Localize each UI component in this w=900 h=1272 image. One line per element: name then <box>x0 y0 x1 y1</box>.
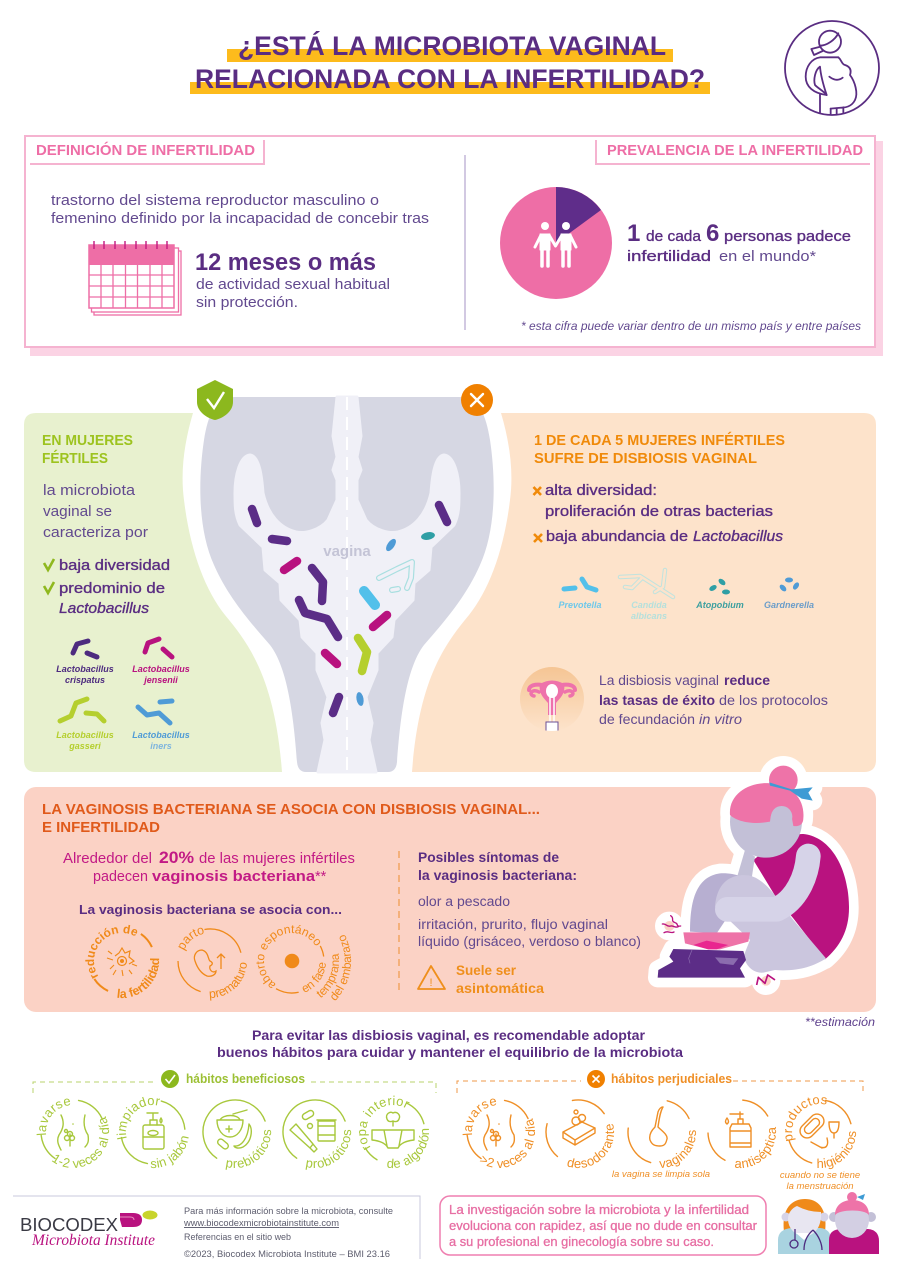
text: prevalence: 6 <box>706 220 719 247</box>
text: prevalence: 1 <box>627 220 640 247</box>
list: fertile features <box>44 557 170 617</box>
text: symptoms <box>418 850 641 949</box>
labels: species: crispatus <box>65 675 105 685</box>
caption: vagina cleans itself: la vagina se limpia sola <box>612 1169 710 1180</box>
text: IVF <box>599 672 828 727</box>
habit: hygiene products <box>785 1097 856 1170</box>
labels: species: Lactobacillus <box>56 730 114 740</box>
text: 12 months: 12 meses o más <box>195 249 376 276</box>
icon: orange x <box>461 384 493 416</box>
heading: fertile women <box>42 432 133 467</box>
callout: consult your gynecologist: evoluciona con rapidez, así que no dude en consultar <box>449 1219 757 1233</box>
section: beneficial habits <box>32 1070 436 1170</box>
illustration: woman sitting <box>658 766 849 985</box>
heading: beneficial habits <box>161 1070 305 1088</box>
labels: other bacteria: Atopobium <box>695 600 744 610</box>
labels: species: jensenii <box>143 675 178 685</box>
ovals in cross-section <box>355 531 436 707</box>
section: harmful habits <box>456 1070 864 1192</box>
text: 12 months: sin protección. <box>196 294 298 311</box>
icon: premature birth: parto <box>178 928 204 952</box>
habit: wash 1-2 times: lavarse <box>36 1098 70 1136</box>
logo: Biocodex Microbiota Institute <box>20 1210 158 1249</box>
icon: gardnerella <box>778 578 800 593</box>
icon: jensenii <box>145 639 172 657</box>
text: habits intro <box>217 1028 684 1060</box>
icon: miscarriage: aborto espontáneo <box>256 925 320 988</box>
text: more info: Referencias en el sitio web <box>184 1232 291 1243</box>
text: more info <box>183 1206 393 1260</box>
icon: miscarriage <box>256 925 352 1000</box>
text: microbiota description: la microbiota <box>43 482 136 499</box>
text: prevalence: infertilidad <box>627 248 711 265</box>
icon: reduced fertility: la fertilidad <box>117 958 160 998</box>
doctor <box>778 1199 831 1254</box>
icon: couple <box>535 222 576 266</box>
habit: cotton underwear: ropa interior <box>359 1096 410 1150</box>
habit: washing more than twice: >2 veces al día <box>480 1118 536 1168</box>
list: fertile features: predominio de <box>59 580 165 597</box>
text: 12 months <box>195 249 390 311</box>
heading: harmful habits: hábitos perjudiciales <box>611 1072 732 1086</box>
heading: prevalence: PREVALENCIA DE LA INFERTILIDAD <box>607 142 863 159</box>
icon: warning <box>418 966 445 989</box>
icon: miscarriage: del embarazo <box>331 935 352 1000</box>
text: more info: ©2023, Biocodex Microbiota Institute – BMI 23.16 <box>184 1249 390 1260</box>
callout: consult your gynecologist: La investigación sobre la microbiota y la infertilidad <box>449 1203 749 1217</box>
text: prevalence: en el mundo* <box>719 248 816 265</box>
bacteria in cross-section <box>252 505 447 713</box>
icon: green shield check <box>197 380 233 420</box>
icon: calendar <box>89 241 181 315</box>
text: 20 percent: 20% <box>159 848 194 867</box>
icon: uterus and IVF <box>520 667 584 733</box>
text: more info: www.biocodexmicrobiotainstitute.com <box>183 1218 339 1229</box>
text: microbiota description: caracteriza por <box>43 524 148 541</box>
habit: wash 1-2 times <box>36 1098 110 1168</box>
labels: other bacteria: Gardnerella <box>764 600 814 610</box>
habit: soap-free cleanser: sin jabón <box>150 1136 189 1168</box>
icon: premature birth: prematuro <box>210 962 247 1001</box>
chart: pie 1 in 6 <box>500 187 612 299</box>
habit: antiseptic: antiséptica <box>735 1126 776 1168</box>
icon: miscarriage: temprana <box>316 953 339 998</box>
text: 20 percent: Alrededor del <box>63 851 152 867</box>
labels: species: Lactobacillus <box>132 730 190 740</box>
caption: outside menstruation: la menstruación <box>786 1181 854 1192</box>
heading: beneficial habits: hábitos beneficiosos <box>186 1072 305 1086</box>
icon: crispatus <box>73 641 97 657</box>
habit: prebiotics <box>202 1099 272 1170</box>
habit: antiseptic <box>707 1099 776 1168</box>
text: symptoms: la vaginosis bacteriana: <box>418 868 577 883</box>
diagram: vagina cross-section <box>200 397 494 772</box>
list: dysbiosis features: alta diversidad: <box>545 482 657 499</box>
text: definition <box>51 192 429 227</box>
habit: washing more than twice <box>462 1098 536 1168</box>
text: microbiota description: vaginal se <box>43 503 112 520</box>
text: more info: Para más información sobre la microbiota, consulte <box>184 1206 393 1217</box>
labels: species: gasseri <box>68 741 101 751</box>
list: fertile features: baja diversidad <box>59 557 170 574</box>
text: 20 percent <box>63 848 355 885</box>
text: 12 months: de actividad sexual habitual <box>196 276 390 293</box>
patient <box>829 1192 879 1254</box>
title: RELACIONADA CON LA INFERTILIDAD? <box>195 64 705 94</box>
habit: probiotics: probióticos <box>306 1130 352 1170</box>
habit: hygiene products: productos <box>785 1097 827 1142</box>
text: habits intro: buenos hábitos para cuidar y mantener el equilibrio de la microbiota <box>217 1045 684 1060</box>
habit: vaginal douches <box>627 1100 696 1168</box>
heading: dysbiosis: 1 DE CADA 5 MUJERES INFÉRTILES <box>534 432 785 449</box>
habit: soap-free cleanser: limpiador <box>116 1096 160 1140</box>
heading: harmful habits <box>587 1070 732 1088</box>
title <box>190 30 710 94</box>
legend: other bacteria <box>558 570 814 621</box>
icon: iners <box>138 701 172 723</box>
text: 20 percent: ** <box>315 869 327 885</box>
heading: vaginosis: E INFERTILIDAD <box>42 819 160 836</box>
heading: definition: DEFINICIÓN DE INFERTILIDAD <box>36 141 255 159</box>
text: habits intro: Para evitar las disbiosis vaginal, es recomendable adoptar <box>252 1028 646 1043</box>
labels: species: Lactobacillus <box>132 664 190 674</box>
habit: cotton underwear <box>359 1096 429 1168</box>
panel: definition and prevalence <box>25 136 883 356</box>
icon: reduced fertility <box>85 924 160 998</box>
text: prevalence: personas padece <box>724 228 851 245</box>
list: dysbiosis features: baja abundancia de <box>546 528 688 545</box>
text: IVF: las tasas de éxito <box>599 692 715 708</box>
heading: dysbiosis: SUFRE DE DISBIOSIS VAGINAL <box>534 450 757 467</box>
text: 20 percent: vaginosis bacteriana <box>152 868 316 885</box>
text: definition: femenino definido por la incapacidad de concebir tras <box>51 210 429 227</box>
labels: species: iners <box>150 741 172 751</box>
heading: vaginosis <box>42 801 540 836</box>
text: IVF: reduce <box>724 672 770 688</box>
habit: prebiotics: prebióticos <box>226 1130 272 1170</box>
habit: probiotics <box>282 1099 352 1170</box>
icon: premature birth <box>177 928 247 1001</box>
heading: fertile women: FÉRTILES <box>42 450 108 467</box>
habit: deodorant soap: desodorante <box>568 1124 614 1168</box>
habit: hygiene products: higiénicos <box>817 1131 856 1170</box>
footer: logo and references <box>13 1196 420 1260</box>
text: asymptomatic: asintomática <box>456 980 544 996</box>
icon: prevotella <box>564 579 596 590</box>
text: asymptomatic <box>456 962 544 996</box>
callout: consult your gynecologist: a su profesional en ginecología sobre su caso. <box>449 1235 714 1249</box>
panel: fertile women <box>24 413 282 772</box>
text: definition: trastorno del sistema reproductor masculino o <box>51 192 379 209</box>
text: IVF: in vitro <box>699 711 742 727</box>
caption: outside menstruation: cuando no se tiene <box>780 1170 860 1181</box>
labels: other bacteria <box>558 600 814 621</box>
text: IVF: La disbiosis vaginal <box>599 672 719 688</box>
illustration: doctor and patient <box>778 1192 879 1254</box>
subheading: associations: La vaginosis bacteriana se asocia con... <box>79 902 342 917</box>
text: microbiota description <box>43 482 148 541</box>
habit: cotton underwear: de algodón <box>387 1128 429 1168</box>
habit: soap-free cleanser <box>116 1096 189 1168</box>
labels: other bacteria: Prevotella <box>558 600 602 610</box>
label: vagina: vagina <box>323 543 371 560</box>
list: fertile features: Lactobacillus <box>59 600 150 617</box>
labels: other bacteria: albicans <box>631 611 667 621</box>
icon: gasseri <box>60 699 104 721</box>
list: dysbiosis features <box>534 482 784 545</box>
panel: bacterial vaginosis <box>24 787 876 1012</box>
text: 20 percent: de las mujeres infértiles <box>199 851 355 867</box>
labels: species: Lactobacillus <box>56 664 114 674</box>
footnote: estimation: **estimación <box>805 1015 875 1029</box>
caption: outside menstruation <box>780 1170 860 1192</box>
panel: infertile women <box>412 413 876 772</box>
text: symptoms: líquido (grisáceo, verdoso o blanco) <box>418 934 641 949</box>
list: dysbiosis features: proliferación de otras bacterias <box>545 503 773 520</box>
icon: candida <box>620 570 673 597</box>
legend: lactobacillus species <box>60 639 172 723</box>
habit: washing more than twice: lavarse <box>462 1098 496 1136</box>
icon: reduced fertility: reducción de <box>85 924 138 979</box>
icon: warning: ! <box>429 977 433 989</box>
text: symptoms: irritación, prurito, flujo vaginal <box>418 917 608 932</box>
habit: vaginal douches: vaginales <box>659 1130 696 1168</box>
heading: fertile women: EN MUJERES <box>42 432 133 449</box>
heading: vaginosis: LA VAGINOSIS BACTERIANA SE ASOCIA CON DISBIOSIS VAGINAL... <box>42 801 540 818</box>
callout: consult your gynecologist <box>440 1196 766 1255</box>
text: 20 percent: padecen <box>93 869 148 885</box>
text: symptoms: Posibles síntomas de <box>418 850 560 865</box>
text: IVF: de fecundación <box>599 711 695 727</box>
text: symptoms: olor a pescado <box>418 894 510 909</box>
habit: wash 1-2 times: 1-2 veces al día <box>52 1116 110 1168</box>
candida in cross-section <box>379 562 412 590</box>
title: ¿ESTÁ LA MICROBIOTA VAGINAL <box>238 30 666 61</box>
labels: other bacteria: Candida <box>631 600 667 610</box>
list: dysbiosis features: Lactobacillus <box>693 528 784 545</box>
text: prevalence: de cada <box>646 228 702 245</box>
logo: Biocodex Microbiota Institute: BIOCODEX <box>20 1215 118 1235</box>
icon: atopobium <box>708 578 730 594</box>
text: prevalence <box>627 220 851 265</box>
icon: pregnant woman <box>785 0 879 115</box>
text: asymptomatic: Suele ser <box>456 962 517 978</box>
habit: deodorant soap <box>545 1099 614 1168</box>
icon: miscarriage: en fase <box>302 962 326 992</box>
labels: species <box>56 664 190 751</box>
logo: Biocodex Microbiota Institute: Microbiota Institute <box>31 1232 155 1249</box>
text: IVF: de los protocolos <box>719 692 828 708</box>
footnote: prevalence: * esta cifra puede variar dentro de un mismo país y entre países <box>521 319 861 333</box>
heading: dysbiosis <box>534 432 785 467</box>
